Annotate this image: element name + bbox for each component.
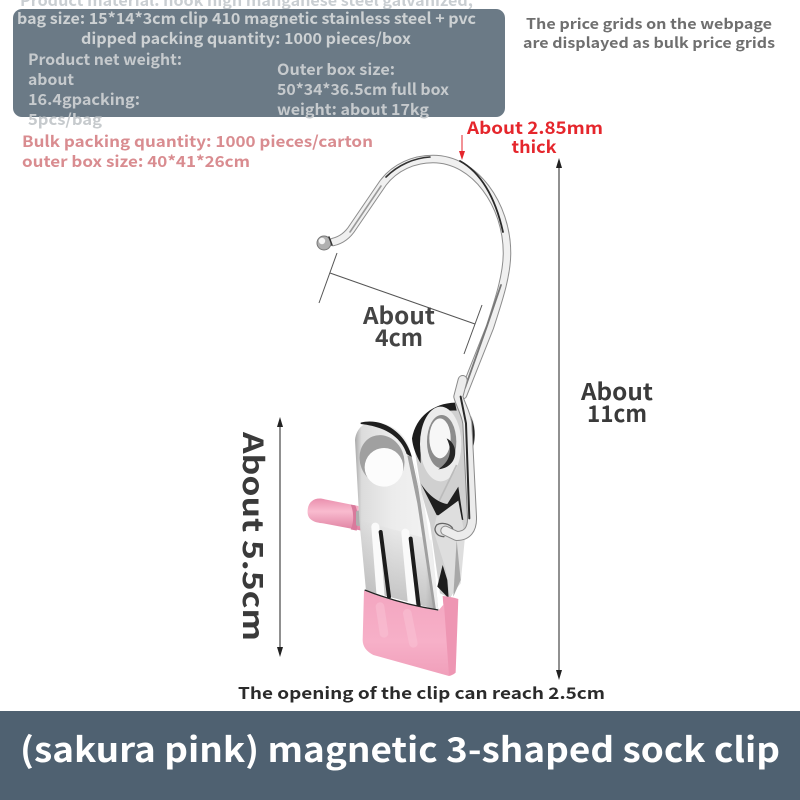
arrow: thickness (459, 135, 465, 160)
bulk packing text: outer box size: 40*41*26cm (22, 150, 250, 172)
hook ball tip (317, 236, 332, 250)
spec text: net weight: Product net weight: (28, 48, 182, 70)
spec text: outer box: weight: about 17kg (277, 98, 429, 120)
spec text: outer box (277, 58, 449, 120)
small ring (435, 523, 453, 537)
label: about 5.5cm: About 5.5cm (234, 431, 274, 641)
label: about 4cm: 4cm (375, 319, 423, 353)
grooves (375, 527, 419, 606)
panel: product specifications (13, 7, 505, 130)
rear plate (412, 403, 475, 598)
wire loop front (435, 380, 472, 537)
hook (317, 157, 507, 395)
spec text: outer box: 50*34*36.5cm full box (277, 78, 449, 100)
note: price grids (523, 13, 775, 53)
bulk packing text: Bulk packing quantity: 1000 pieces/carton (22, 130, 373, 152)
thickness label: thick (512, 133, 557, 158)
thickness label: About 2.85mm (466, 114, 603, 139)
spec text: outer box: Outer box size: (277, 58, 395, 80)
label: about 11cm: 11cm (587, 395, 647, 429)
bulk packing text (22, 130, 373, 172)
clip illustration (308, 380, 475, 676)
pink handle (308, 499, 362, 531)
label: about 4cm (362, 297, 435, 353)
spec text: bag size and material: bag size: 15*14*3cm clip 410 magnetic stainless steel + pvc (17, 7, 476, 29)
spec text: net weight: about (28, 68, 74, 90)
label: about 11cm (580, 373, 653, 429)
spec text: packing quantity: dipped packing quantity: 1000 pieces/box (81, 27, 411, 49)
front plate (352, 421, 438, 610)
title banner (0, 711, 800, 800)
label: about 11cm: About (580, 373, 653, 407)
dimension: hook opening (319, 253, 482, 354)
oval hole (352, 428, 412, 492)
spec text: net weight: 5pcs/bag (28, 108, 102, 130)
dimension arrow: about 5.5cm (277, 417, 283, 657)
spec text: net weight (28, 48, 182, 130)
thickness label (466, 114, 603, 158)
title text: (sakura pink) magnetic 3-shaped sock clip (20, 723, 780, 772)
label: about 4cm: About (362, 297, 435, 331)
caption: clip opening: The opening of the clip can reach 2.5cm (238, 680, 605, 704)
note: price grids: are displayed as bulk price grids (523, 32, 775, 53)
dimension arrow: about 11cm (556, 158, 562, 680)
spec text: net weight: 16.4gpacking: (28, 88, 140, 110)
note: price grids: The price grids on the webpage (526, 13, 772, 34)
pink dipped tip (363, 590, 458, 676)
